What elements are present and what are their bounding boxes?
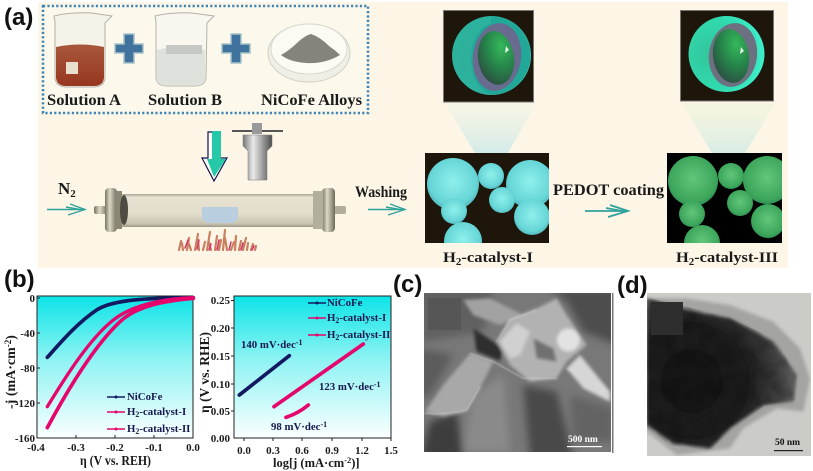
x ticks: 0.9	[325, 445, 339, 457]
texture: mottling	[647, 298, 797, 450]
curve: NiCoFe	[47, 298, 193, 357]
x ticks: -0.3	[67, 442, 85, 454]
legend: 2	[335, 316, 339, 325]
chart: Tafel plot	[198, 295, 398, 470]
label: N2: 2	[70, 188, 76, 200]
legend: H	[327, 312, 335, 324]
annotation: 140 mV/dec: 140 mV·dec	[241, 339, 296, 351]
chart: polarization curves	[3, 293, 200, 469]
icon: petri dish with alloy powder	[268, 24, 350, 82]
icon: tube furnace	[94, 188, 346, 232]
beam from cluster I to inset	[445, 103, 536, 153]
x ticks: -0.4	[27, 442, 45, 454]
image: SEM micrograph	[424, 293, 611, 452]
legend: NiCoFe	[127, 391, 163, 403]
x ticks: 0.6	[295, 445, 309, 457]
label: NiCoFe Alloys: NiCoFe Alloys	[261, 92, 362, 109]
x axis title: -2	[344, 455, 351, 465]
scale bar: 50 nm: 50 nm	[775, 438, 800, 448]
x ticks: 0.0	[237, 445, 251, 457]
label: H2-catalyst-I: -catalyst-I	[461, 250, 533, 266]
x axis title: )]	[351, 456, 360, 470]
inset square	[428, 298, 461, 330]
y ticks: 0	[30, 293, 36, 305]
legend	[107, 391, 190, 436]
x ticks: -0.2	[106, 442, 124, 454]
icon: plus sign	[115, 34, 143, 63]
icon: beaker solution A	[54, 13, 112, 87]
x axis title: log[j (mA·cm	[273, 456, 344, 470]
line: NiCoFe 140 mV/dec	[239, 356, 289, 395]
arrow: PEDOT coating	[585, 205, 628, 217]
curve: H2-catalyst-I	[47, 298, 193, 407]
icon: autoclave	[232, 123, 283, 180]
label: Washing: Washing	[355, 184, 407, 201]
y ticks: 0.20	[211, 323, 230, 335]
annotation: 98 mV/dec: 98 mV·dec	[271, 421, 320, 433]
annotation: 98 mV/dec: -1	[320, 420, 327, 429]
label (d): (d)	[617, 272, 648, 299]
dotted box: precursors	[43, 6, 368, 113]
y ticks: -80	[20, 363, 35, 375]
scale bar: 500 nm	[567, 435, 602, 447]
inset: H2-catalyst-I sphere	[444, 10, 534, 102]
annotation: 123 mV/dec: 123 mV·dec	[319, 381, 374, 393]
legend: H	[127, 423, 135, 435]
y ticks	[211, 295, 230, 445]
image: H2-catalyst-I spheres	[425, 153, 549, 243]
icon: plus sign	[222, 34, 250, 63]
x ticks: 0.3	[266, 445, 280, 457]
annotation: 140 mV/dec: -1	[296, 338, 303, 347]
image: H2-catalyst-III spheres	[667, 153, 782, 243]
icon: flames	[179, 230, 256, 250]
label (b): (b)	[4, 266, 35, 293]
arrow fill	[207, 131, 226, 177]
label: N2: N	[58, 179, 70, 198]
y ticks: 0.10	[211, 379, 230, 391]
panel: (a) synthesis scheme background	[38, 2, 788, 268]
label: H2-catalyst-III: H	[676, 250, 688, 266]
label: PEDOT coating: PEDOT coating	[553, 182, 664, 199]
legend: -catalyst-I	[139, 406, 186, 418]
y ticks: 0.25	[211, 295, 230, 307]
x ticks	[237, 445, 398, 457]
inset square	[651, 302, 683, 335]
legend: -catalyst-II	[339, 329, 390, 341]
label (a): (a)	[4, 4, 33, 31]
x ticks: -0.1	[145, 442, 163, 454]
y ticks: 0.15	[211, 351, 230, 363]
legend: -catalyst-I	[339, 312, 386, 324]
x ticks: 1.2	[355, 445, 369, 457]
arrow: washing	[368, 204, 405, 215]
y ticks: -160	[15, 433, 35, 445]
label: Solution A: Solution A	[47, 92, 121, 109]
line: H2-catalyst-I 123 mV/dec	[274, 344, 363, 407]
scale bar: 500 nm: 500 nm	[568, 435, 598, 445]
image: TEM micrograph	[647, 293, 811, 456]
y ticks: -40	[20, 328, 35, 340]
legend: H	[127, 406, 135, 418]
curve: H2-catalyst-II	[47, 298, 193, 428]
legend	[308, 297, 390, 342]
label (c): (c)	[393, 271, 422, 298]
legend: -catalyst-II	[139, 423, 190, 435]
y ticks: 0.05	[211, 406, 230, 418]
line: H2-catalyst-II 98 mV/dec	[286, 405, 308, 417]
label: Solution B: Solution B	[148, 92, 222, 109]
label: H2-catalyst-III: -catalyst-III	[694, 250, 778, 266]
label: H2-catalyst-III: 2	[689, 257, 694, 268]
y axis title: -2	[3, 339, 13, 347]
arrow: N2 inflow	[47, 204, 85, 215]
beam from cluster III to inset	[682, 103, 776, 153]
scale bar: 50 nm	[774, 438, 803, 451]
legend: H	[327, 329, 335, 341]
x axis title: η (V vs. REH)	[80, 454, 151, 469]
x ticks: 1.5	[384, 445, 398, 457]
x ticks	[27, 442, 200, 454]
legend: NiCoFe	[327, 297, 363, 309]
y axis title: η (V vs. RHE)	[198, 332, 213, 413]
legend: 2	[135, 427, 139, 436]
label: H2-catalyst-I: 2	[456, 257, 461, 268]
label: H2-catalyst-I: H	[443, 250, 455, 266]
legend: 2	[335, 333, 339, 342]
y axis title: )	[4, 335, 19, 340]
y ticks: -120	[15, 398, 35, 410]
icon: beaker solution B	[155, 13, 214, 86]
right edge line of panel c	[612, 293, 614, 453]
x ticks: 0.0	[186, 442, 200, 454]
y axis title: -j (mA·cm	[4, 347, 19, 409]
arrow: down to furnace	[202, 132, 227, 181]
y ticks	[15, 293, 36, 445]
y ticks: 0.00	[211, 433, 230, 445]
annotation: 123 mV/dec: -1	[374, 380, 381, 389]
legend: 2	[135, 410, 139, 419]
inset: H2-catalyst-III sphere	[680, 10, 774, 101]
